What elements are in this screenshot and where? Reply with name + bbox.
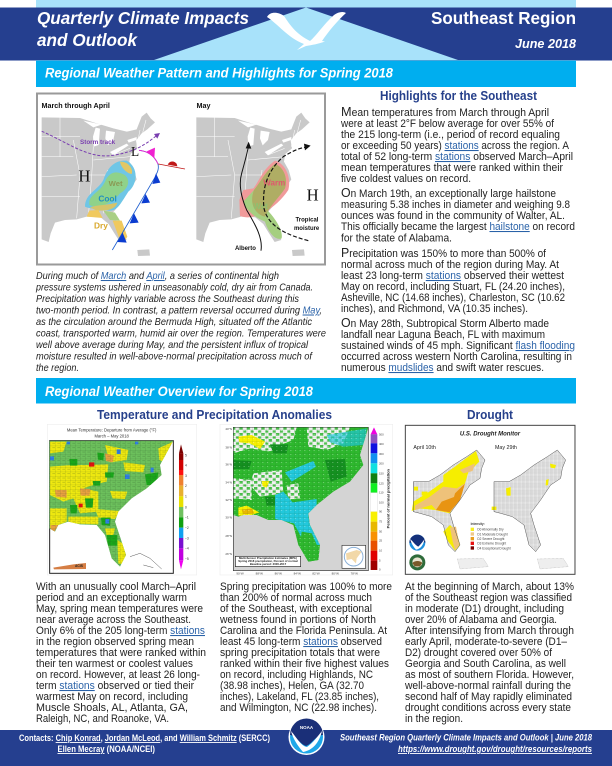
- legend: drought intensity: D3 Extreme Drought: [477, 542, 506, 546]
- text block: caption: moisture resulted in well-above-normal precipitation across much of: [36, 352, 313, 362]
- title: Quarterly Climate Impacts: [37, 8, 249, 28]
- text block: drought summary: early April, moderate-to-severe (D1–: [405, 636, 567, 648]
- heading: highlights for the southeast: Highlights for the Southeast: [380, 89, 538, 103]
- chart: precipitation map: Spring 2018 precipitation, Percent of normal: [238, 559, 298, 563]
- text block: hailstone: This officially became the largest hailstone on record: [341, 221, 575, 233]
- region and date: Southeast Region: [431, 8, 576, 28]
- map: March through April: H: [78, 167, 90, 186]
- text block: caption: coast, transported warm, humid air over the region. Temperatures were: [36, 328, 326, 340]
- legend: precipitation scale: 90: [379, 510, 383, 514]
- text block: hailstone: for the state of Alabama.: [341, 232, 452, 244]
- text block: cold temperatures: mean temperatures that were ranked within their: [341, 162, 563, 174]
- legend: precipitation scale: 150: [379, 471, 384, 475]
- legend: temperature scale: −2: [185, 526, 189, 530]
- chart: precipitation map: 36°N: [225, 462, 232, 466]
- legend: drought intensity: D0 Abnormally Dry: [477, 528, 504, 532]
- map: March through April: Cool: [98, 193, 117, 203]
- legend: precipitation scale: 400: [379, 442, 384, 446]
- legend: drought intensity: [471, 522, 511, 550]
- text block: cold temperatures: total of 52 long-term stations observed March–April: [341, 151, 573, 163]
- contacts: Ellen Mecray (NOAA/NCEI): [58, 744, 155, 754]
- text block: drought summary: in moderate (D1) drought, including: [405, 603, 564, 615]
- legend: precipitation scale: 50: [379, 530, 383, 534]
- header banner: [0, 0, 612, 61]
- chart: temperature departure map: [47, 424, 197, 575]
- icon: NIDIS seal: [409, 554, 425, 570]
- text block: Alberto: On May 28th, Subtropical Storm Alberto made: [341, 315, 549, 330]
- text block: precipitation: Asheville, NC (14.68 inches), Charleston, SC (10.62: [341, 292, 565, 304]
- chart: precipitation map: 34°N: [225, 480, 232, 484]
- legend: temperature scale: 3: [185, 474, 187, 478]
- text block: drought summary: over 20% of Alabama and Georgia.: [405, 614, 557, 626]
- text block: temperature summary: May, spring mean temperatures were: [36, 603, 203, 615]
- text block: cold temperatures: the 215 long-term (i.e., period of record equaling: [341, 129, 560, 141]
- text block: caption: During much of March and April, a series of continental high: [36, 271, 279, 282]
- text block: temperature summary: in the region observed spring mean: [36, 636, 194, 648]
- icon: NOAA seal: [409, 535, 425, 551]
- legend: drought intensity: Intensity:: [471, 522, 485, 526]
- legend: precipitation scale: Percent of normal precipitation: [386, 469, 390, 528]
- report credit: [340, 732, 592, 754]
- text block: caption: Precipitation was highly variable across the Southeast during this: [36, 294, 299, 305]
- text block: precipitation: inches), and Richmond, VA (10.35 inches).: [341, 303, 528, 315]
- text block: temperature summary: Raleigh, NC, and Roanoke, VA.: [36, 713, 169, 725]
- text block: Alberto: landfall near Laguna Beach, FL with maximum: [341, 329, 545, 341]
- section heading bar: overview: Regional Weather Overview for Spring 2018: [45, 384, 313, 399]
- map: May: H: [307, 186, 319, 205]
- text block: Alberto: sustained winds of 45 mph. Significant flash flooding: [341, 340, 575, 352]
- text block: cold temperatures: [340, 104, 573, 185]
- contacts: Contacts: Chip Konrad, Jordan McLeod, and William Schmitz (SERCC): [19, 733, 270, 743]
- text block: temperature summary: Muscle Shoals, AL, Atlanta, GA,: [36, 702, 188, 714]
- text block: Alberto: numerous mudslides and swift water rescues.: [341, 362, 544, 374]
- text block: drought summary: of the Southeast region was classified: [405, 592, 572, 604]
- text block: drought summary: At the beginning of March, about 13%: [405, 581, 575, 593]
- chart: precipitation map: 30°N: [225, 516, 232, 520]
- legend: precipitation scale: 110: [379, 491, 384, 495]
- text block: precipitation: least 23 long-term stations observed their wettest: [341, 270, 564, 282]
- chart: precipitation map: 38°N: [225, 445, 232, 449]
- panel: weather pattern maps: [37, 94, 325, 264]
- text block: temperature summary: near average across the Southeast.: [36, 614, 191, 626]
- text block: drought summary: well-above-normal rainfall during the: [404, 680, 571, 692]
- text block: Alberto: [341, 315, 575, 374]
- legend: precipitation scale: 5: [379, 559, 381, 563]
- text block: temperature summary: [35, 581, 206, 725]
- text block: precipitation summary: inches), Lakeland, FL (23.85 inches),: [220, 691, 379, 703]
- text block: temperature summary: Only 6% of the 205 long-term stations: [36, 625, 205, 637]
- chart: precipitation map: 26°N: [225, 552, 232, 556]
- text block: precipitation summary: on record, including Highlands, NC: [220, 669, 373, 681]
- footer band: [0, 730, 612, 766]
- text block: temperature summary: With an unusually cool March–April: [36, 581, 196, 593]
- text block: caption: pressure systems ushered in unseasonably cold, dry air from Canada.: [35, 282, 313, 294]
- legend: temperature scale: 1: [185, 495, 187, 499]
- map: March through April: Dry: [94, 220, 108, 230]
- map: March through April: [42, 113, 185, 256]
- text block: cold temperatures: Mean temperatures from March through April: [341, 104, 549, 119]
- section heading bar: overview: [36, 378, 576, 404]
- chart: precipitation map: [220, 424, 393, 575]
- map: May: Wet: [253, 202, 268, 211]
- text block: cold temperatures: were at least 2°F below average for over 55% of: [340, 118, 554, 130]
- legend: temperature scale: 5: [185, 454, 187, 458]
- legend: precipitation scale: 300: [379, 452, 384, 456]
- text block: drought summary: in the region.: [405, 713, 463, 725]
- map: May: [196, 113, 320, 256]
- text block: drought summary: After intensifying from March through: [405, 625, 574, 637]
- map: May 29th: [492, 450, 566, 552]
- text block: precipitation: [341, 245, 565, 315]
- text block: drought summary: [404, 581, 575, 725]
- map: May: Alberto: [235, 246, 256, 252]
- section heading bar: highlights: [36, 60, 576, 87]
- icon: NOAA logo: NOAA: [300, 725, 314, 730]
- legend: temperature scale: −3: [185, 536, 189, 540]
- legend: drought intensity: D4 Exceptional Drought: [477, 546, 511, 550]
- text block: precipitation summary: spring precipitation totals that were: [220, 647, 380, 659]
- chart: precipitation map: 40°N: [225, 427, 232, 431]
- text block: caption: [35, 271, 326, 374]
- legend: precipitation scale: 100: [379, 501, 384, 505]
- region and date: [431, 8, 577, 51]
- text block: temperature summary: term stations observed or tied their: [36, 680, 194, 692]
- chart: precipitation map: 78°W: [351, 571, 358, 575]
- text block: drought summary: second half of May rapidly eliminated: [405, 691, 572, 703]
- title: and Outlook: [37, 30, 138, 50]
- chart: drought monitor maps: U.S. Drought Monitor: [460, 431, 521, 437]
- text block: precipitation summary: than 200% of normal across much: [220, 592, 372, 604]
- region and date: June 2018: [515, 36, 577, 51]
- legend: drought intensity: D1 Moderate Drought: [477, 532, 508, 536]
- legend: precipitation scale: 25: [379, 539, 383, 543]
- chart: precipitation map: 28°N: [225, 534, 232, 538]
- text block: cold temperatures: five coldest values on record.: [341, 173, 471, 185]
- chart: temperature departure map: ACIS: [75, 564, 84, 568]
- text block: precipitation summary: (38.98 inches), Helen, GA (32.70: [220, 680, 364, 692]
- chart: drought monitor maps: April 10th: [413, 445, 436, 451]
- text block: precipitation: normal across much of the region during May. At: [341, 259, 559, 271]
- chart: precipitation map: Multi-Sensor Precipitation Estimates (MPE): [239, 556, 297, 560]
- map labels: March through April: [42, 101, 110, 110]
- legend: precipitation scale: 10: [379, 549, 383, 553]
- chart: precipitation map: 80°W: [332, 571, 339, 575]
- legend: precipitation scale: 500: [379, 432, 384, 436]
- legend: temperature scale: 0: [185, 505, 187, 509]
- text block: precipitation summary: ranked within their five highest values: [220, 658, 389, 670]
- text block: drought summary: D2) drought covered over 50% of: [405, 647, 552, 659]
- text block: hailstone: ounces was found in the community of Walter, AL.: [341, 210, 565, 222]
- text block: drought summary: as most of southern Florida. However,: [405, 669, 574, 681]
- legend: precipitation scale: 200: [379, 461, 384, 465]
- map: May: Tropical: [295, 217, 319, 223]
- text block: precipitation summary: and Wilmington, NC (22.98 inches).: [220, 702, 377, 714]
- text block: precipitation: May on record, including Stuart, FL (24.20 inches),: [341, 281, 565, 293]
- contacts: [19, 733, 270, 754]
- map: March through April: L: [131, 144, 139, 159]
- chart: temperature departure map: March – May 2018: [94, 434, 130, 439]
- chart: temperature departure map: Mean Temperature: Departure from Average (°F): [67, 428, 157, 433]
- icon: NOAA bird: [267, 12, 346, 50]
- text block: precipitation summary: wetness found in portions of North: [219, 614, 376, 626]
- heading: anomalies: Temperature and Precipitation Anomalies: [97, 408, 332, 422]
- text block: precipitation summary: Carolina and the Florida Peninsula. At: [220, 625, 387, 637]
- text block: caption: the region.: [36, 363, 79, 374]
- text block: hailstone: measuring 5.38 inches in diameter and weighing 9.8: [341, 199, 570, 211]
- chart: precipitation map: Baseline period: 2000-2017: [250, 562, 287, 566]
- chart: precipitation map: 90°W: [236, 571, 244, 575]
- title: [37, 8, 249, 50]
- chart: precipitation map: 84°W: [294, 571, 301, 575]
- text block: temperature summary: period and an exceptionally warm: [36, 592, 187, 604]
- text block: caption: well above average during May, and the persistent influx of tropical: [36, 340, 309, 351]
- chart: precipitation map: 32°N: [225, 498, 232, 502]
- legend: temperature scale: 4: [185, 464, 187, 468]
- text block: cold temperatures: or exceeding 50 years) stations across the region. A: [341, 140, 570, 152]
- heading: drought: Drought: [467, 408, 514, 422]
- text block: drought summary: drought conditions across every state: [405, 702, 571, 714]
- text block: caption: two-month period. In contrast, a pattern reversal occurred during May,: [36, 306, 322, 316]
- text block: drought summary: Georgia and South Carolina, as well: [405, 658, 566, 670]
- text block: hailstone: [341, 185, 575, 244]
- chart: drought monitor maps: [405, 425, 575, 574]
- map labels: [42, 101, 210, 110]
- map: March through April: Wet: [109, 179, 123, 188]
- chart: drought monitor maps: May 29th: [495, 445, 517, 451]
- text block: precipitation summary: of the Southeast, with exceptional: [220, 603, 372, 615]
- text block: caption: as the circulation around the Bermuda High, situated off the Atlantic: [36, 317, 313, 328]
- text block: temperature summary: their ten warmest or coolest values: [36, 658, 193, 670]
- legend: precipitation scale: 75: [379, 520, 383, 524]
- legend: precipitation scale: 0: [379, 568, 381, 572]
- text block: precipitation summary: least 45 long-term stations observed: [220, 636, 382, 648]
- map: May: Warm: [263, 179, 285, 188]
- icon: NOAA logo: [288, 718, 324, 755]
- legend: precipitation scale: 125: [379, 481, 384, 485]
- legend: temperature scale: −5: [185, 557, 189, 561]
- text block: temperature summary: temperatures that were ranked within: [36, 647, 206, 659]
- map labels: May: [196, 101, 210, 110]
- chart: precipitation map: 88°W: [256, 571, 263, 575]
- chart: precipitation map: 82°W: [312, 571, 320, 575]
- chart: precipitation map: 86°W: [275, 571, 282, 575]
- legend: temperature scale: [179, 444, 189, 569]
- legend: drought intensity: D2 Severe Drought: [477, 537, 504, 541]
- legend: temperature scale: −1: [185, 516, 189, 520]
- section heading bar: highlights: Regional Weather Pattern and Highlights for Spring 2018: [45, 66, 393, 80]
- legend: temperature scale: −4: [185, 547, 189, 551]
- text block: Alberto: occurred across western North Carolina, resulting in: [341, 351, 572, 363]
- map: April 10th: [412, 450, 485, 552]
- map: March through April: Storm track: [80, 139, 116, 146]
- text block: temperature summary: on record. However, at least 26 long-: [36, 669, 200, 681]
- legend: temperature scale: 2: [185, 484, 187, 488]
- text block: precipitation: Precipitation was 150% to more than 500% of: [341, 245, 546, 260]
- text block: hailstone: On March 19th, an exceptionally large hailstone: [341, 185, 556, 200]
- text block: temperature summary: warmest May on record, including: [35, 691, 188, 703]
- legend: precipitation scale: [371, 427, 390, 572]
- text block: precipitation summary: [219, 581, 392, 714]
- text block: precipitation summary: Spring precipitation was 100% to more: [220, 581, 392, 593]
- map: May: moisture: [294, 226, 320, 232]
